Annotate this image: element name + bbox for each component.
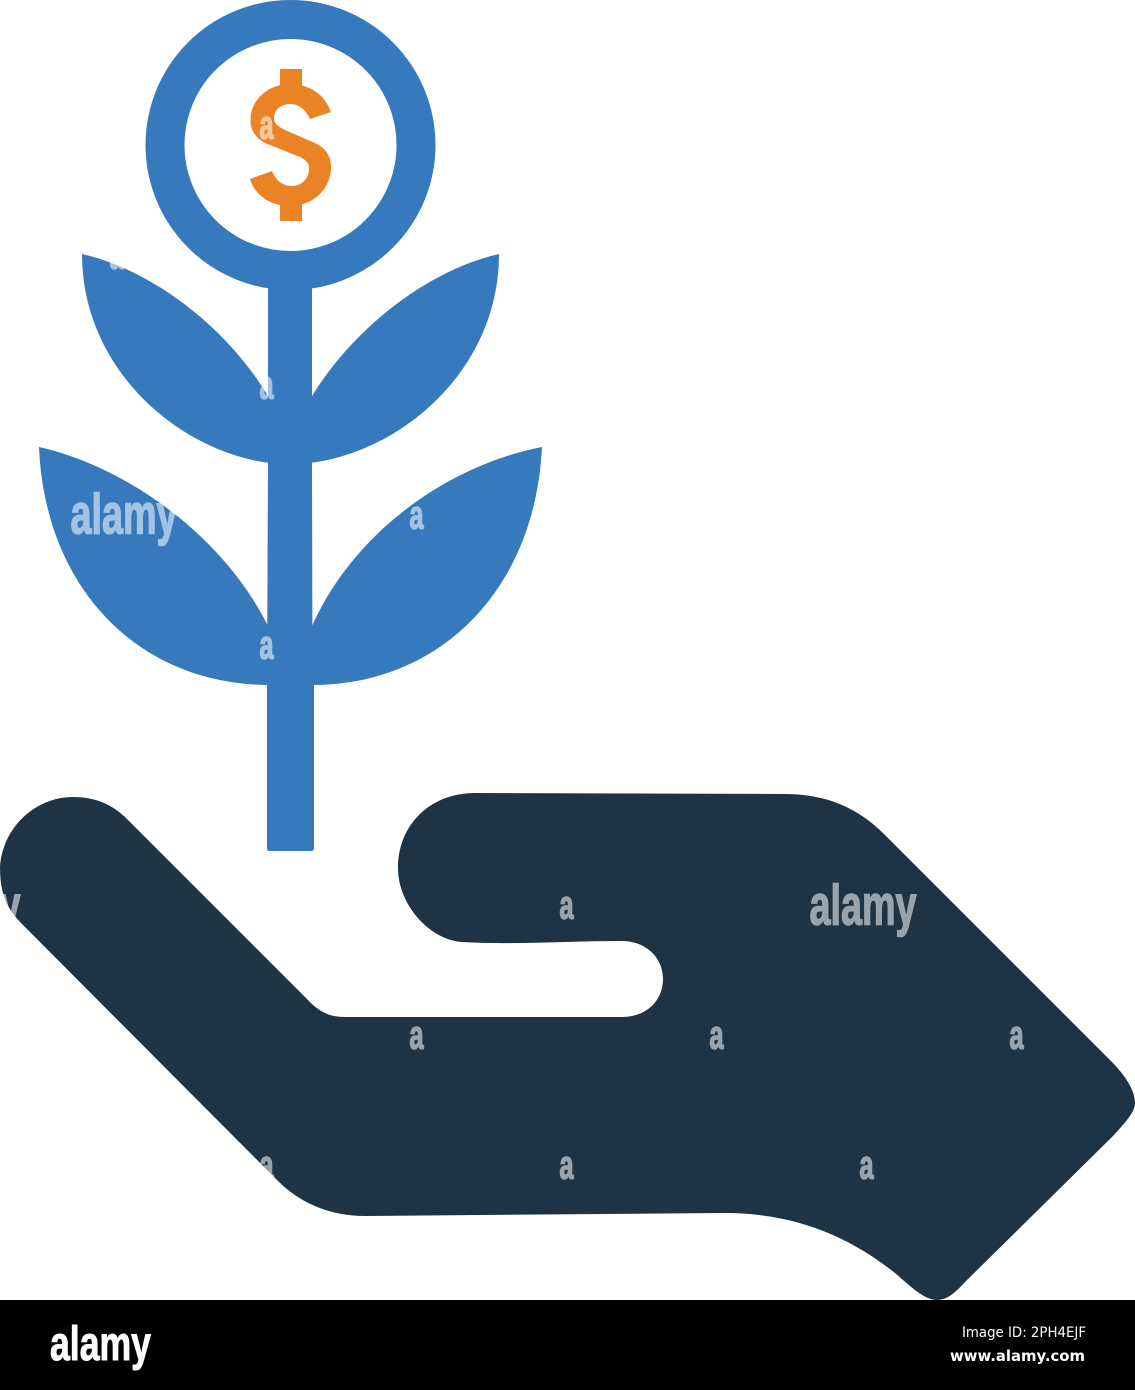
watermark: small marks: a (260, 364, 274, 408)
image id: Image ID: 2PH4EJF (962, 1325, 1086, 1341)
watermark: small marks: a (960, 1274, 974, 1318)
coin ring (165, 20, 416, 270)
upper right leaf (310, 254, 499, 463)
watermark: large marks (0, 482, 917, 938)
lower right leaf (312, 447, 542, 685)
watermark: small marks (110, 104, 1024, 1318)
watermark: small marks: a (1010, 1014, 1024, 1058)
plant stem (267, 280, 314, 851)
footer logo: alamy (50, 1318, 151, 1371)
icon: money plant (39, 20, 542, 851)
watermark: large marks: alamy (70, 482, 178, 546)
watermark: small marks: a (260, 1144, 274, 1188)
watermark: small marks: a (560, 884, 574, 928)
icon: open hand (0, 793, 1135, 1300)
watermark: small marks: a (410, 494, 424, 538)
watermark: large marks: alamy (810, 874, 917, 938)
watermark: small marks: a (710, 1014, 724, 1058)
watermark: small marks: a (860, 1144, 874, 1188)
watermark: small marks: a (410, 1014, 424, 1058)
website: www.alamy.com (950, 1347, 1085, 1365)
dollar sign (250, 69, 331, 221)
watermark: small marks: a (560, 1144, 574, 1188)
upper left leaf (82, 254, 270, 463)
watermark: small marks: a (260, 104, 274, 148)
lower left leaf (39, 447, 270, 685)
footer bar (0, 1300, 1135, 1390)
watermark: small marks: a (260, 624, 274, 668)
watermark: small marks: a (110, 234, 124, 278)
